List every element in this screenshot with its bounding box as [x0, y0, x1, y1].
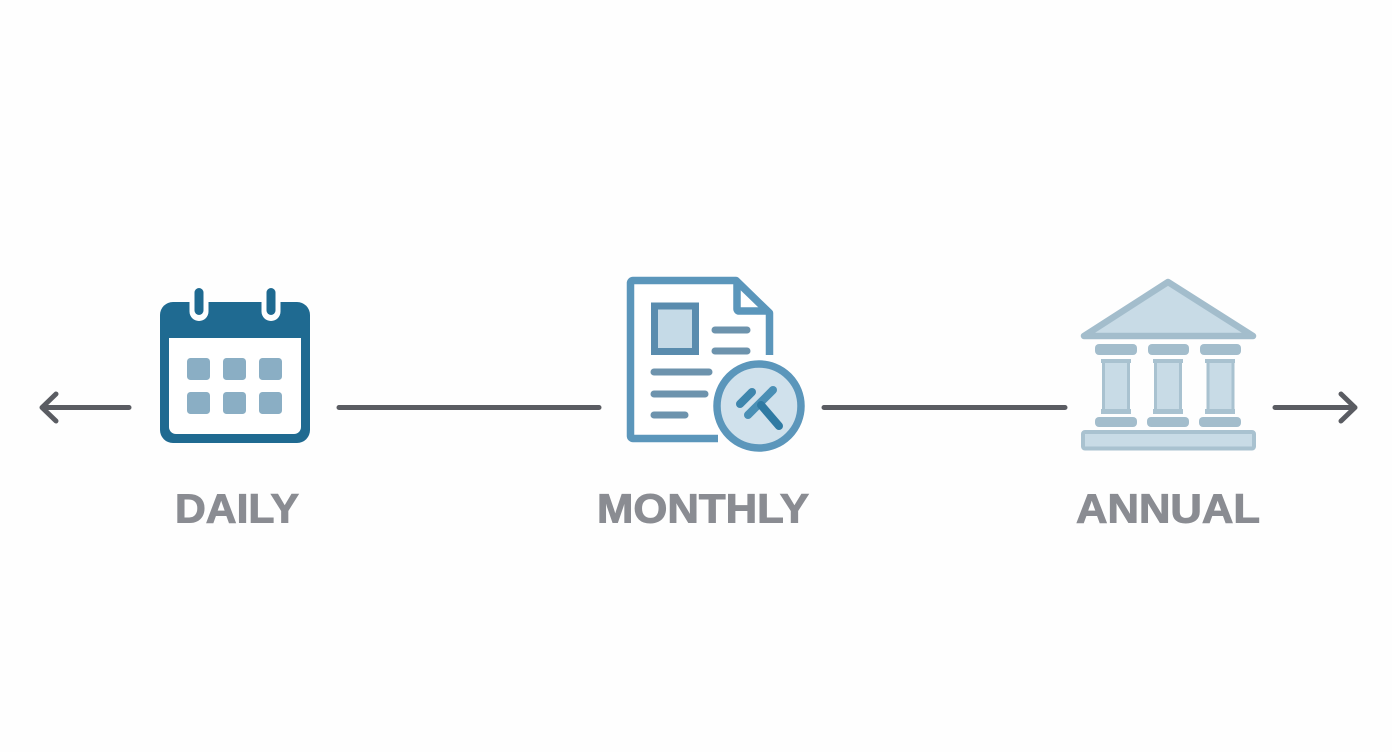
right arrow [1275, 394, 1355, 421]
icon: bank building [1083, 282, 1254, 448]
left arrow [42, 394, 129, 421]
connector: monthly to annual [824, 405, 1065, 410]
label: monthly: MONTHLY [597, 486, 809, 532]
icon: calendar [160, 284, 310, 443]
connector: daily to monthly [339, 405, 599, 410]
label: annual: ANNUAL [1076, 486, 1260, 532]
label: daily: DAILY [175, 486, 299, 532]
icon: document with gavel badge [630, 280, 805, 452]
